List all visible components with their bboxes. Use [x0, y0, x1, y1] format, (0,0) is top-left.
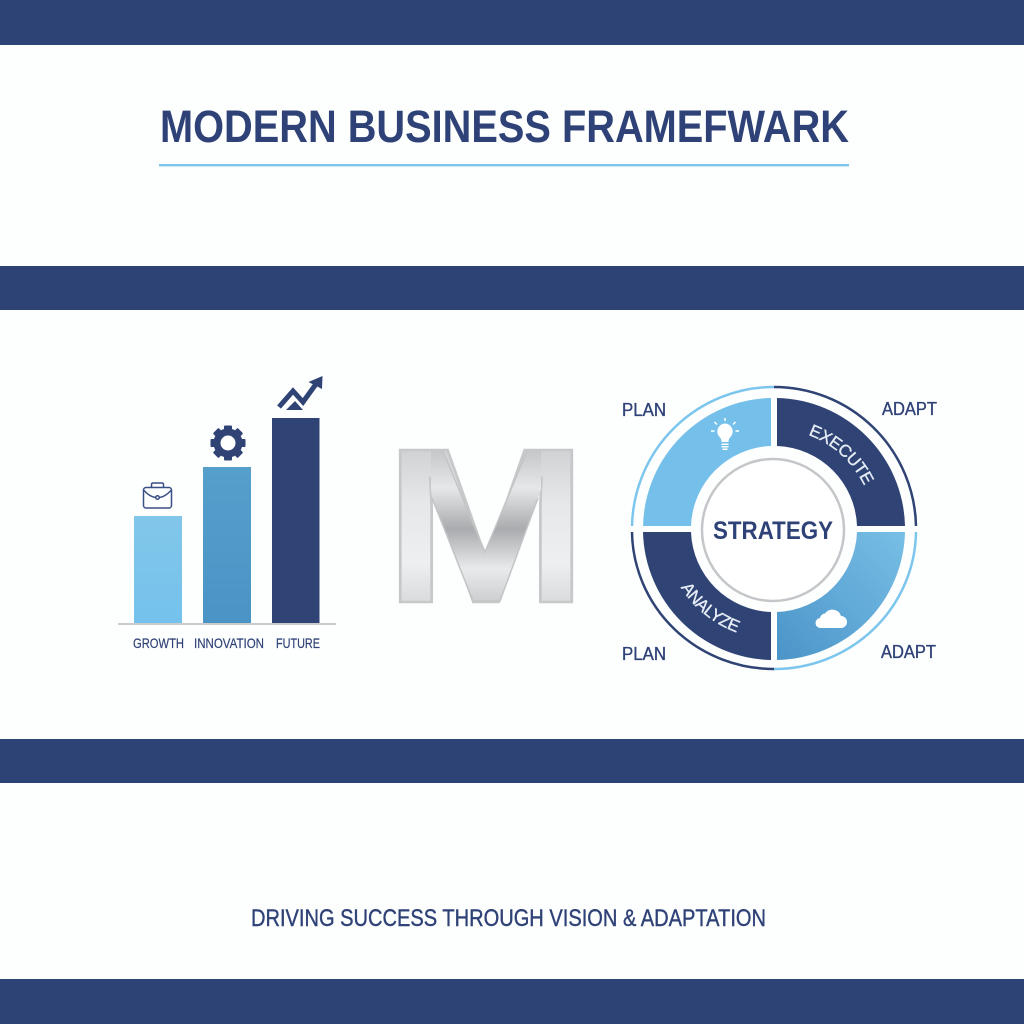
label: innovation: INNOVATION [194, 635, 264, 651]
label: growth: GROWTH [133, 635, 184, 651]
silver M emblem [384, 403, 588, 649]
icon: trend arrow [279, 376, 322, 410]
outer ring: bottom-right [774, 532, 916, 669]
band: upper middle [0, 266, 1024, 310]
band: lower middle [0, 739, 1024, 783]
outer ring: bottom-left [632, 532, 774, 669]
bar: future [272, 418, 320, 623]
tagline: DRIVING SUCCESS THROUGH VISION & ADAPTATION [251, 905, 766, 932]
title underline [159, 164, 849, 166]
metallic chevron facet [431, 451, 541, 601]
center label: STRATEGY [713, 517, 833, 545]
label: future: FUTURE [276, 635, 320, 651]
strategy wheel [622, 386, 937, 670]
title: MODERN BUSINESS FRAMEFWARK [160, 101, 849, 152]
segment text: execute: EXECUTE [809, 424, 874, 486]
center hub [702, 459, 844, 601]
label: adapt top: ADAPT [882, 399, 937, 419]
icon: briefcase [144, 483, 172, 508]
bar chart [118, 376, 336, 651]
letter M: M [384, 403, 588, 649]
segment: plan top-left [643, 398, 771, 526]
label: plan bottom: PLAN [622, 644, 666, 664]
chart baseline [118, 623, 336, 625]
outer ring: top-right [774, 387, 916, 526]
icon: gear [210, 426, 246, 460]
label: plan top: PLAN [622, 400, 666, 420]
segment: execute top-right [777, 398, 905, 526]
bar: innovation [203, 467, 251, 623]
bar: growth [134, 516, 182, 623]
chevron bevel lines [432, 451, 538, 601]
icon: light bulb [711, 418, 739, 450]
segment text: analyze: ANALYZE [680, 584, 740, 633]
segment: adapt bottom-right [777, 532, 905, 660]
band: bottom [0, 979, 1024, 1024]
segment: analyze bottom-left [643, 532, 771, 660]
band: top [0, 0, 1024, 45]
icon: cloud [815, 610, 847, 628]
label: adapt bottom: ADAPT [881, 642, 936, 662]
outer ring: top-left [632, 387, 774, 526]
